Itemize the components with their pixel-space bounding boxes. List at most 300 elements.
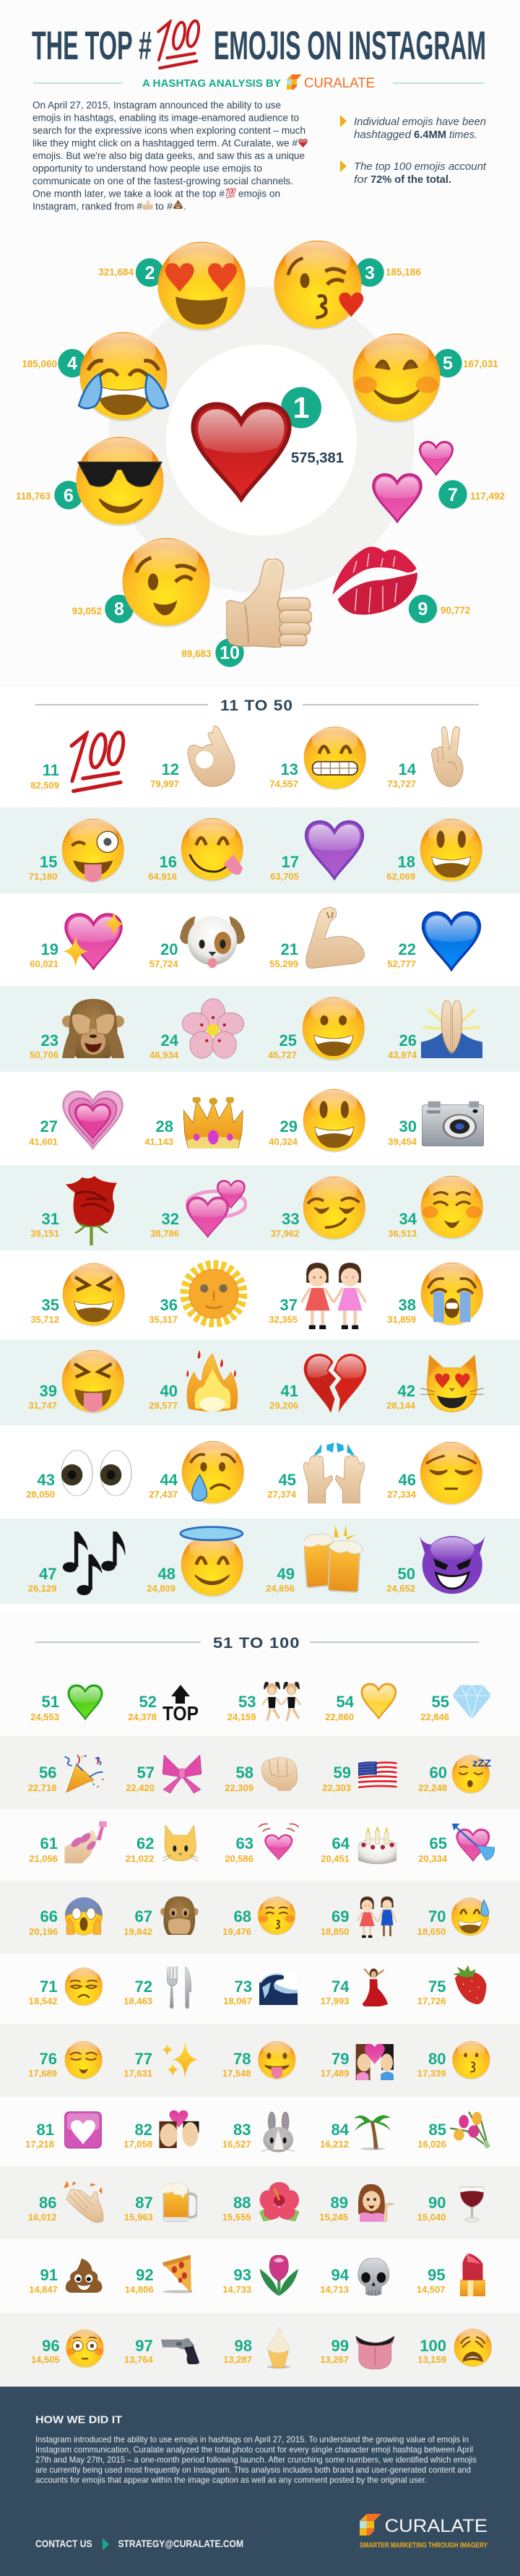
icon: broken heart bbox=[304, 1354, 366, 1413]
count: 31,747 bbox=[28, 1400, 57, 1411]
count: 20,586 bbox=[225, 1853, 254, 1864]
icon: yellow heart bbox=[362, 1684, 396, 1718]
icon: dog bbox=[180, 916, 245, 968]
rank: 79 bbox=[332, 2050, 350, 2068]
icon: heart eyes cat bbox=[420, 1355, 484, 1412]
count: 24,159 bbox=[228, 1712, 256, 1722]
item 16 bbox=[148, 818, 243, 882]
rank: 41 bbox=[281, 1382, 298, 1400]
rank: 87 bbox=[135, 2194, 153, 2212]
item 52 bbox=[128, 1685, 199, 1725]
icon: hundred bbox=[72, 731, 126, 791]
item 72 bbox=[124, 1967, 191, 2009]
rank: 98 bbox=[235, 2337, 252, 2355]
icon: rose bbox=[66, 1176, 117, 1245]
count: 17,631 bbox=[124, 2068, 152, 2079]
icon: weary bbox=[454, 2329, 492, 2367]
item 78 bbox=[222, 2041, 295, 2079]
rank: 34 bbox=[399, 1210, 417, 1228]
item 40 bbox=[149, 1350, 238, 1412]
count: 24,809 bbox=[147, 1583, 176, 1594]
icon: skull bbox=[358, 2258, 389, 2296]
count: 57,724 bbox=[150, 958, 178, 969]
item 47 bbox=[28, 1532, 125, 1595]
icon: crying bbox=[182, 1441, 244, 1505]
icon: see no evil monkey bbox=[62, 999, 124, 1058]
rank: 72 bbox=[135, 1978, 152, 1996]
contact bbox=[35, 2538, 243, 2550]
item 65 bbox=[418, 1824, 495, 1864]
count: 60,021 bbox=[30, 958, 58, 969]
rank 8: wink bbox=[72, 538, 210, 627]
icon: smiling devil bbox=[418, 1532, 487, 1594]
rank 5: smiling eyes bbox=[352, 333, 498, 423]
item 96 bbox=[31, 2330, 103, 2368]
icon: growing heart bbox=[64, 1091, 122, 1149]
count: 14,713 bbox=[320, 2284, 349, 2295]
rank: 31 bbox=[42, 1210, 59, 1228]
rank: 57 bbox=[137, 1764, 155, 1782]
rank: 58 bbox=[236, 1764, 254, 1782]
rank: 20 bbox=[160, 940, 178, 958]
icon: wink tongue bbox=[62, 819, 124, 883]
rank: 43 bbox=[38, 1471, 55, 1489]
item 68 bbox=[222, 1897, 295, 1937]
rank 8: wink: 8 bbox=[114, 599, 124, 619]
item 15 bbox=[29, 819, 124, 883]
heading: 51 to 100: 51 TO 100 bbox=[213, 1634, 300, 1652]
item 23 bbox=[30, 999, 124, 1060]
rank 3: kissing heart: 185,186 bbox=[386, 267, 421, 278]
icon: flushed bbox=[66, 2330, 103, 2368]
item 70 bbox=[417, 1898, 489, 1937]
icon: bunny girls bbox=[262, 1682, 281, 1721]
icon: diamond bbox=[453, 1686, 491, 1719]
count: 21,022 bbox=[126, 1853, 155, 1864]
item 63 bbox=[225, 1822, 300, 1864]
rank 6: sunglasses bbox=[16, 437, 164, 526]
item 11 bbox=[30, 731, 126, 791]
item 89 bbox=[319, 2184, 394, 2223]
count: 62,069 bbox=[386, 871, 415, 882]
item 17 bbox=[270, 822, 363, 882]
icon: clinking beers bbox=[302, 1525, 364, 1592]
rank: 32 bbox=[162, 1210, 179, 1228]
icon: bouquet bbox=[450, 2112, 490, 2149]
row bands 11 to 50 bbox=[0, 807, 520, 1604]
count: 38,786 bbox=[150, 1228, 179, 1239]
rank: 96 bbox=[42, 2337, 60, 2355]
item 53 bbox=[228, 1682, 300, 1722]
icon: yum bbox=[181, 818, 243, 882]
callout: 6.4MM hashtagged: Individual emojis have been bbox=[354, 116, 486, 128]
rank: 37 bbox=[280, 1296, 298, 1314]
rank: 74 bbox=[332, 1978, 350, 1996]
callout: 6.4MM hashtagged: hashtagged bbox=[354, 129, 412, 141]
item 27 bbox=[29, 1091, 122, 1149]
count: 14,505 bbox=[31, 2354, 60, 2365]
count: 16,012 bbox=[28, 2212, 56, 2223]
count: 14,733 bbox=[222, 2284, 251, 2295]
item 34 bbox=[388, 1176, 483, 1240]
rank: 86 bbox=[39, 2194, 56, 2212]
icon: ice cream bbox=[266, 2327, 290, 2369]
item 86 bbox=[28, 2181, 103, 2223]
rank: 76 bbox=[40, 2050, 57, 2068]
icon: sweat smile bbox=[451, 1898, 489, 1936]
intro paragraph: . bbox=[183, 201, 186, 212]
count: 45,727 bbox=[268, 1049, 297, 1060]
count: 39,151 bbox=[30, 1228, 59, 1239]
title: THE TOP # bbox=[32, 22, 152, 68]
rank: 67 bbox=[135, 1907, 152, 1925]
rank: 90 bbox=[428, 2194, 446, 2212]
count: 16,527 bbox=[222, 2139, 251, 2150]
rank: 82 bbox=[135, 2121, 152, 2139]
callout: 6.4MM hashtagged: 6.4MM bbox=[414, 129, 446, 141]
icon: heart with arrow bbox=[452, 1824, 495, 1861]
icon: unamused bbox=[65, 1967, 103, 2006]
icon: camera bbox=[422, 1102, 484, 1146]
callout: 6.4MM hashtagged: times. bbox=[449, 129, 477, 141]
count: 37,962 bbox=[271, 1228, 300, 1239]
icon: fire bbox=[186, 1350, 238, 1412]
methodology text: accounts for emojis that appear within the image caption as well as any comment posted by the original user. bbox=[35, 2476, 427, 2485]
count: 17,548 bbox=[222, 2068, 251, 2079]
icon: praying hands bbox=[421, 1000, 482, 1058]
item 33 bbox=[271, 1177, 365, 1240]
rank: 100 bbox=[420, 2337, 446, 2355]
curalate logo bbox=[360, 2514, 488, 2550]
item 42 bbox=[386, 1355, 484, 1412]
rank 6: sunglasses: 6 bbox=[64, 486, 74, 506]
rank: 51 bbox=[42, 1693, 59, 1711]
count: 13,764 bbox=[124, 2354, 153, 2365]
rank: 45 bbox=[279, 1471, 296, 1489]
count: 24,553 bbox=[30, 1712, 59, 1722]
count: 71,180 bbox=[29, 871, 58, 882]
icon: birthday cake bbox=[358, 1826, 396, 1864]
count: 36,513 bbox=[388, 1228, 417, 1239]
count: 17,726 bbox=[417, 1996, 446, 2006]
rank: 89 bbox=[331, 2194, 348, 2212]
count: 26,129 bbox=[28, 1583, 56, 1594]
subtitle: CURALATE bbox=[304, 75, 375, 91]
rank 3: kissing heart: 3 bbox=[365, 263, 375, 283]
rank: 60 bbox=[430, 1764, 447, 1782]
methodology text: Instagram communication, Curalate analyzed the total photo count for every single character emoji hashtag between April bbox=[35, 2445, 473, 2455]
item 28 bbox=[144, 1096, 243, 1149]
rank: 22 bbox=[399, 940, 416, 958]
rank: 61 bbox=[40, 1834, 58, 1852]
rank: 40 bbox=[160, 1382, 178, 1400]
count: 55,299 bbox=[269, 958, 298, 969]
rank 3: kissing heart bbox=[274, 241, 421, 330]
icon: us flag bbox=[358, 1761, 397, 1790]
icon: sobbing bbox=[421, 1263, 483, 1326]
rank: 92 bbox=[136, 2266, 154, 2284]
item 55 bbox=[420, 1686, 491, 1722]
icon: party popper bbox=[65, 1755, 104, 1793]
icon: speak no evil monkey bbox=[160, 1897, 199, 1935]
rank: 73 bbox=[235, 1978, 252, 1996]
rank: 97 bbox=[135, 2337, 153, 2355]
rank 6: sunglasses: 118,763 bbox=[16, 491, 51, 502]
count: 63,705 bbox=[270, 871, 299, 882]
item 81 bbox=[25, 2112, 101, 2150]
intro paragraph: like they might click on a hashtagged term. At Curalate, we # bbox=[32, 137, 298, 149]
item 41 bbox=[269, 1354, 366, 1413]
rank 7: two pink hearts: 117,492 bbox=[470, 491, 505, 502]
count: 39,454 bbox=[388, 1136, 417, 1147]
rank: 47 bbox=[39, 1565, 56, 1583]
count: 13,159 bbox=[417, 2354, 446, 2365]
callout: 6.4MM hashtagged bbox=[340, 115, 486, 141]
rank: 21 bbox=[281, 940, 298, 958]
item 90 bbox=[417, 2187, 484, 2223]
rank: 24 bbox=[161, 1031, 179, 1049]
item 25 bbox=[268, 997, 365, 1061]
rank 4: tears of joy: 4 bbox=[67, 353, 77, 374]
rank 4: tears of joy bbox=[22, 332, 168, 421]
rank: 39 bbox=[40, 1382, 57, 1400]
intro paragraph: emojis on bbox=[238, 188, 280, 199]
count: 29,577 bbox=[149, 1400, 178, 1411]
rank: 65 bbox=[430, 1834, 447, 1852]
rank: 18 bbox=[398, 853, 415, 871]
count: 18,650 bbox=[417, 1926, 446, 1937]
item 46 bbox=[387, 1442, 482, 1506]
rank 10: thumbs up: 10 bbox=[220, 643, 240, 664]
icon: cat bbox=[162, 1825, 199, 1862]
icon: dancer bbox=[363, 1969, 388, 2007]
count: 14,806 bbox=[125, 2284, 154, 2295]
rank: 48 bbox=[158, 1565, 176, 1583]
item 84 bbox=[320, 2116, 391, 2150]
icon: top arrow: TOP bbox=[162, 1702, 199, 1725]
item 24 bbox=[150, 999, 244, 1060]
icon: lipstick bbox=[460, 2254, 485, 2296]
item 44 bbox=[149, 1441, 244, 1505]
count: 15,040 bbox=[417, 2212, 446, 2223]
curalate logo: SMARTER MARKETING THROUGH IMAGERY bbox=[360, 2541, 488, 2550]
rank: 94 bbox=[332, 2266, 350, 2284]
rank: 29 bbox=[280, 1117, 298, 1135]
rank: 70 bbox=[428, 1907, 446, 1925]
rank: 26 bbox=[399, 1031, 417, 1049]
icon: grimace bbox=[304, 726, 366, 790]
item 56 bbox=[28, 1755, 104, 1793]
item 80 bbox=[417, 2041, 490, 2079]
count: 17,993 bbox=[321, 1996, 350, 2006]
icon: squinting tongue bbox=[62, 1350, 124, 1414]
rank: 46 bbox=[399, 1471, 416, 1489]
icon: relaxed bbox=[421, 1176, 483, 1240]
item 29 bbox=[269, 1089, 365, 1153]
rank: 93 bbox=[234, 2266, 251, 2284]
item 85 bbox=[417, 2112, 490, 2150]
callout: 72% of total: for bbox=[354, 174, 368, 186]
rank: 69 bbox=[332, 1907, 350, 1925]
count: 31,859 bbox=[387, 1314, 416, 1325]
count: 22,718 bbox=[28, 1782, 56, 1793]
count: 16,212 bbox=[320, 2139, 349, 2150]
count: 28,050 bbox=[26, 1489, 55, 1500]
item 73 bbox=[223, 1973, 298, 2006]
icon: revolving hearts bbox=[187, 1180, 246, 1237]
rank: 80 bbox=[428, 2050, 446, 2068]
icon: peace hand bbox=[431, 727, 463, 786]
rank 8: wink: 93,052 bbox=[72, 606, 102, 617]
count: 24,652 bbox=[386, 1583, 415, 1594]
row bands 51 to 100 bbox=[0, 1736, 520, 2387]
count: 21,056 bbox=[29, 1853, 58, 1864]
rank: 35 bbox=[42, 1296, 59, 1314]
item 74 bbox=[321, 1969, 388, 2007]
item 12 bbox=[150, 726, 235, 789]
icon: crown bbox=[183, 1096, 243, 1149]
rank: 99 bbox=[332, 2337, 349, 2355]
item 35 bbox=[30, 1263, 125, 1327]
icon: tulip bbox=[260, 2255, 298, 2296]
rank: 49 bbox=[277, 1565, 295, 1583]
icon: palm tree bbox=[354, 2116, 391, 2150]
rank: 19 bbox=[41, 940, 58, 958]
item 82 bbox=[124, 2111, 199, 2150]
rank: 55 bbox=[432, 1693, 449, 1711]
intro paragraph: emojis in hashtags, enabling its image-enamored audience to bbox=[32, 113, 299, 123]
item 20 bbox=[150, 916, 245, 969]
count: 22,303 bbox=[322, 1782, 351, 1793]
item 95 bbox=[417, 2254, 485, 2296]
rank: 12 bbox=[162, 760, 179, 778]
icon: flexed arm bbox=[306, 907, 365, 969]
item 32 bbox=[150, 1180, 246, 1239]
rank: 68 bbox=[234, 1907, 251, 1925]
callout: 72% of total: The top 100 emojis account bbox=[354, 161, 487, 173]
count: 28,144 bbox=[386, 1400, 416, 1411]
rank 9: kiss lips bbox=[332, 546, 470, 623]
icon: couple kiss bbox=[159, 2111, 199, 2148]
icon: green heart bbox=[68, 1686, 103, 1719]
rank: 77 bbox=[135, 2050, 152, 2068]
icon: ok hand bbox=[188, 726, 235, 786]
count: 20,196 bbox=[29, 1926, 58, 1937]
item 38 bbox=[387, 1263, 483, 1326]
count: 20,334 bbox=[418, 1853, 448, 1864]
icon: couple with heart bbox=[356, 2044, 394, 2080]
count: 22,309 bbox=[225, 1782, 254, 1793]
rank 9: kiss lips: 9 bbox=[418, 599, 428, 619]
icon: sparkling heart bbox=[62, 911, 125, 969]
item 43 bbox=[26, 1451, 131, 1500]
count: 22,846 bbox=[420, 1712, 449, 1722]
item 14 bbox=[387, 727, 463, 789]
rank: 83 bbox=[233, 2121, 251, 2139]
icon: pizza bbox=[162, 2255, 195, 2293]
count: 43,974 bbox=[388, 1049, 417, 1060]
count: 35,712 bbox=[30, 1314, 59, 1325]
count: 74,557 bbox=[269, 778, 298, 789]
rank: 63 bbox=[236, 1834, 254, 1852]
rank: 66 bbox=[40, 1907, 58, 1925]
item 26 bbox=[388, 1000, 482, 1060]
icon: smirk bbox=[303, 1177, 365, 1240]
callout: 72% of total bbox=[340, 160, 487, 186]
icon: blue heart bbox=[423, 913, 480, 969]
rank: 59 bbox=[334, 1764, 351, 1782]
item 75 bbox=[417, 1966, 487, 2006]
rank 2: heart eyes: 2 bbox=[145, 263, 155, 283]
rank: 13 bbox=[281, 760, 298, 778]
icon: beating heart bbox=[258, 1822, 300, 1860]
rank: 14 bbox=[399, 760, 417, 778]
item 37 bbox=[269, 1263, 366, 1329]
item 66 bbox=[29, 1897, 103, 1937]
count: 27,374 bbox=[267, 1489, 297, 1500]
count: 16,026 bbox=[417, 2139, 446, 2150]
icon: smiley bbox=[303, 1089, 365, 1153]
icon: heart square bbox=[65, 2112, 101, 2148]
rank: 75 bbox=[428, 1978, 446, 1996]
icon: raised hands bbox=[303, 1443, 365, 1503]
rank: 95 bbox=[428, 2266, 446, 2284]
icon: wave bbox=[259, 1973, 298, 2005]
rank: 85 bbox=[429, 2121, 446, 2139]
item 76 bbox=[28, 2041, 103, 2079]
rank: 54 bbox=[337, 1693, 355, 1711]
rank 5: smiling eyes: 5 bbox=[443, 353, 453, 374]
item 67 bbox=[124, 1897, 199, 1937]
count: 24,378 bbox=[128, 1712, 157, 1722]
item 94 bbox=[320, 2258, 389, 2296]
rank: 30 bbox=[399, 1117, 417, 1135]
count: 50,706 bbox=[30, 1049, 58, 1060]
rank 2: heart eyes bbox=[98, 241, 246, 331]
icon: purple heart bbox=[306, 822, 363, 878]
rank: 71 bbox=[40, 1978, 58, 1996]
count: 20,451 bbox=[321, 1853, 350, 1864]
heading: how we did it: HOW WE DID IT bbox=[35, 2414, 122, 2426]
item 50 bbox=[386, 1532, 487, 1594]
rank: 78 bbox=[233, 2050, 251, 2068]
item 36 bbox=[149, 1266, 242, 1325]
icon: strawberry bbox=[454, 1966, 487, 2004]
icon: pensive bbox=[420, 1442, 482, 1506]
count: 17,689 bbox=[28, 2068, 57, 2079]
item 59 bbox=[322, 1761, 397, 1793]
count: 18,542 bbox=[29, 1996, 58, 2006]
rank 9: kiss lips: 90,772 bbox=[441, 605, 470, 616]
contact: CONTACT US bbox=[35, 2538, 92, 2549]
rank 4: tears of joy: 185,060 bbox=[22, 359, 57, 369]
icon: nail polish bbox=[65, 1821, 107, 1863]
intro paragraph: On April 27, 2015, Instagram announced the ability to use bbox=[32, 100, 281, 111]
icon: two girls bbox=[301, 1263, 334, 1329]
count: 64,916 bbox=[148, 871, 177, 882]
item 19 bbox=[30, 911, 125, 969]
title bbox=[32, 20, 486, 68]
count: 32,355 bbox=[269, 1314, 298, 1325]
count: 15,963 bbox=[124, 2212, 153, 2223]
subtitle bbox=[33, 74, 484, 91]
intro paragraph: emojis. But we're also big data geeks, and saw this as a unique bbox=[32, 150, 305, 161]
icon: sparkles bbox=[162, 2041, 198, 2078]
rank: 62 bbox=[136, 1834, 155, 1852]
rank: 52 bbox=[139, 1693, 157, 1711]
icon: kissing closed eyes bbox=[258, 1897, 295, 1935]
count: 29,206 bbox=[269, 1400, 298, 1411]
